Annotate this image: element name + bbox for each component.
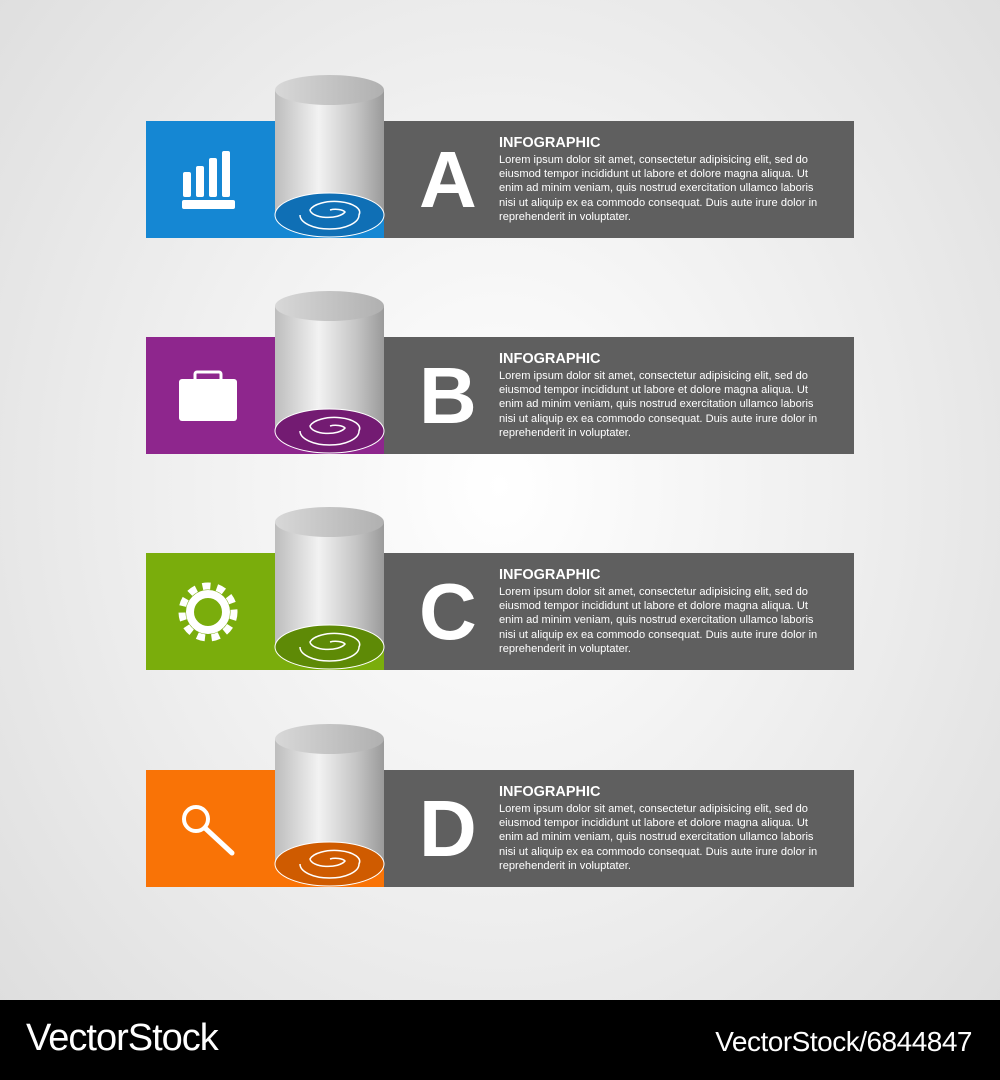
letter: D — [419, 784, 477, 873]
band color — [146, 770, 384, 887]
scroll cylinder — [275, 75, 384, 238]
text block: INFOGRAPHIC — [499, 784, 600, 800]
text block: INFOGRAPHIC — [499, 351, 600, 367]
letter: A — [419, 135, 477, 224]
band color — [146, 553, 384, 670]
icon: bar chart — [182, 151, 235, 209]
letter: C — [419, 567, 477, 656]
row C — [146, 507, 854, 670]
scroll cylinder — [275, 507, 384, 670]
icon: magnifier — [184, 807, 232, 853]
text block: Lorem ipsum dolor sit amet, consectetur adipisicing elit, sed do eiusmod tempor incididunt ut labore et dolore magna aliqua. Ut enim ad minim veniam, quis nostrud exercitation ullamco laboris nisi ut aliquip ex ea commodo consequat. Duis aute irure dolor in reprehenderit in voluptater. — [499, 586, 817, 655]
scroll cylinder — [275, 724, 384, 887]
text block: Lorem ipsum dolor sit amet, consectetur adipisicing elit, sed do eiusmod tempor incididunt ut labore et dolore magna aliqua. Ut enim ad minim veniam, quis nostrud exercitation ullamco laboris nisi ut aliquip ex ea commodo consequat. Duis aute irure dolor in reprehenderit in voluptater. — [499, 154, 817, 223]
row A — [146, 75, 854, 238]
icon: gear — [182, 586, 234, 638]
text block: INFOGRAPHIC — [499, 135, 600, 151]
icon: briefcase — [179, 372, 237, 421]
footer bar — [0, 1000, 1000, 1080]
band dark — [380, 337, 854, 454]
text block: Lorem ipsum dolor sit amet, consectetur adipisicing elit, sed do eiusmod tempor incididunt ut labore et dolore magna aliqua. Ut enim ad minim veniam, quis nostrud exercitation ullamco laboris nisi ut aliquip ex ea commodo consequat. Duis aute irure dolor in reprehenderit in voluptater. — [499, 803, 817, 872]
row B — [146, 291, 854, 454]
band color — [146, 121, 384, 238]
row D — [146, 724, 854, 887]
band dark — [380, 121, 854, 238]
scroll cylinder — [275, 291, 384, 454]
band dark — [380, 770, 854, 887]
footer logo: VectorStock — [26, 1017, 218, 1059]
footer id: VectorStock/6844847 — [715, 1026, 972, 1057]
band color — [146, 337, 384, 454]
text block: Lorem ipsum dolor sit amet, consectetur adipisicing elit, sed do eiusmod tempor incididunt ut labore et dolore magna aliqua. Ut enim ad minim veniam, quis nostrud exercitation ullamco laboris nisi ut aliquip ex ea commodo consequat. Duis aute irure dolor in reprehenderit in voluptater. — [499, 370, 817, 439]
text block: INFOGRAPHIC — [499, 567, 600, 583]
band dark — [380, 553, 854, 670]
letter: B — [419, 351, 477, 440]
